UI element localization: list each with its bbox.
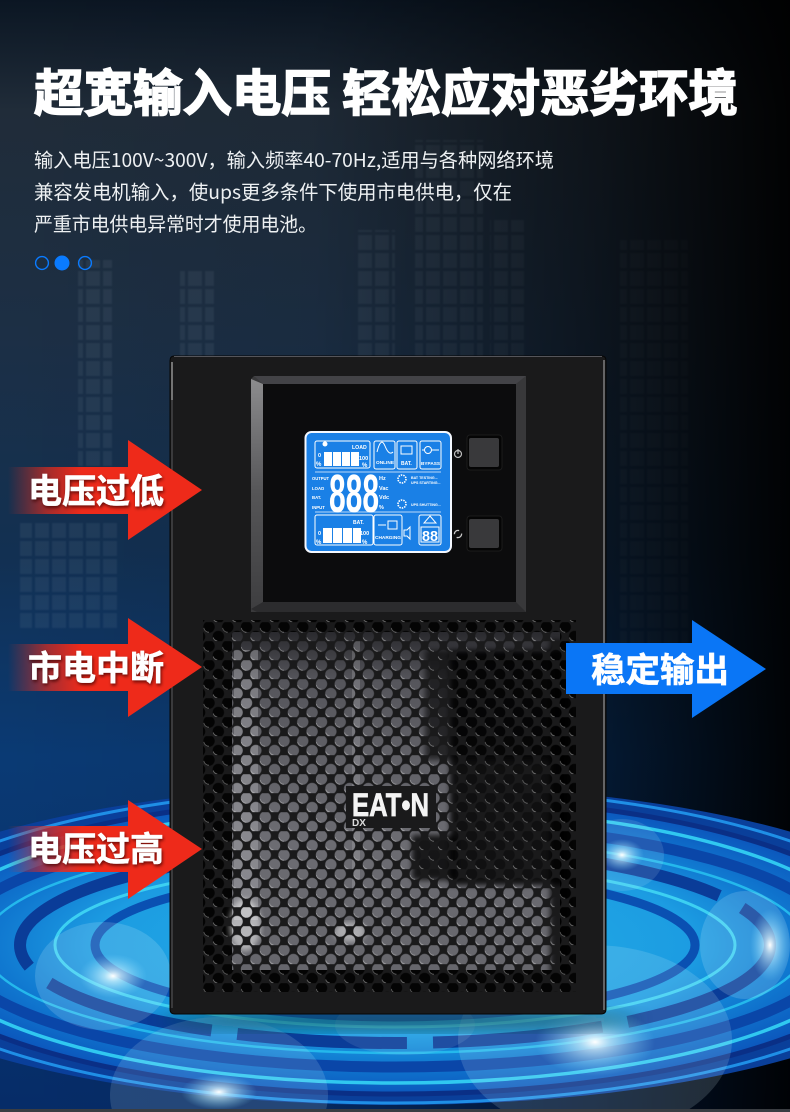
LCD screen: BYPASS: [421, 461, 440, 466]
LCD screen: Hz: [379, 476, 386, 482]
red arrow: voltage too low: [8, 440, 202, 540]
LCD screen: UPS STARTING...: [411, 481, 440, 485]
mode button: [454, 516, 502, 551]
LCD screen: %: [362, 540, 368, 546]
blue arrow: stable output: 稳定输出: [591, 643, 729, 692]
LCD screen: Vdc: [379, 495, 389, 501]
UPS device: [170, 356, 606, 1014]
perforated ventilation mesh: [200, 618, 580, 994]
LCD screen: INPUT: [312, 505, 325, 510]
LCD screen: ONLINE: [376, 460, 394, 465]
LCD screen: %: [316, 540, 322, 546]
title: 超宽输入电压 轻松应对恶劣环境: [34, 54, 738, 126]
red arrow: voltage too high: 电压过高: [28, 822, 164, 871]
LCD screen: UPS SHUTTING...: [411, 503, 441, 507]
front control panel: [251, 376, 526, 612]
LCD screen: %: [379, 505, 384, 511]
description text: [34, 144, 554, 237]
power button: [454, 435, 502, 470]
LCD screen: %: [362, 463, 368, 469]
description text: 严重市电供电异常时才使用电池。: [34, 208, 317, 237]
red arrow: voltage too high: [8, 800, 202, 899]
UPS cabinet: [170, 356, 606, 1014]
LCD screen: CHARGING: [375, 535, 402, 540]
LCD screen: 888: [329, 464, 379, 524]
Eaton logo: EAT•N: [352, 787, 429, 823]
LCD screen: LOAD: [312, 486, 324, 491]
pagination dots: [36, 256, 91, 270]
LCD screen: BAT.: [353, 520, 364, 526]
LCD screen: 0: [318, 453, 321, 459]
LCD screen: %: [316, 462, 322, 468]
LCD screen: LOAD: [352, 445, 367, 451]
LCD screen: 100: [359, 456, 368, 462]
description text: 输入电压100V~300V，输入频率40-70Hz,适用与各种网络环境: [34, 144, 554, 173]
Eaton logo: DX: [352, 818, 366, 829]
LCD screen: BAT TESTING...: [411, 476, 438, 480]
LCD screen: OUTPUT: [312, 476, 329, 481]
blue arrow: stable output: [566, 620, 766, 718]
red arrow: voltage too low: 电压过低: [28, 464, 164, 513]
LCD screen: 100: [360, 531, 369, 537]
red arrow: mains interruption: [8, 618, 202, 717]
LCD screen: BAT.: [312, 495, 321, 500]
LCD screen: 88: [422, 528, 438, 545]
LCD screen: [306, 432, 451, 552]
LCD screen: Vac: [379, 486, 388, 492]
LCD screen: BAT.: [401, 461, 412, 467]
LCD screen: 0: [318, 531, 321, 537]
red arrow: mains interruption: 市电中断: [28, 641, 164, 690]
description text: 兼容发电机输入，使ups更多条件下使用市电供电，仅在: [34, 176, 512, 205]
